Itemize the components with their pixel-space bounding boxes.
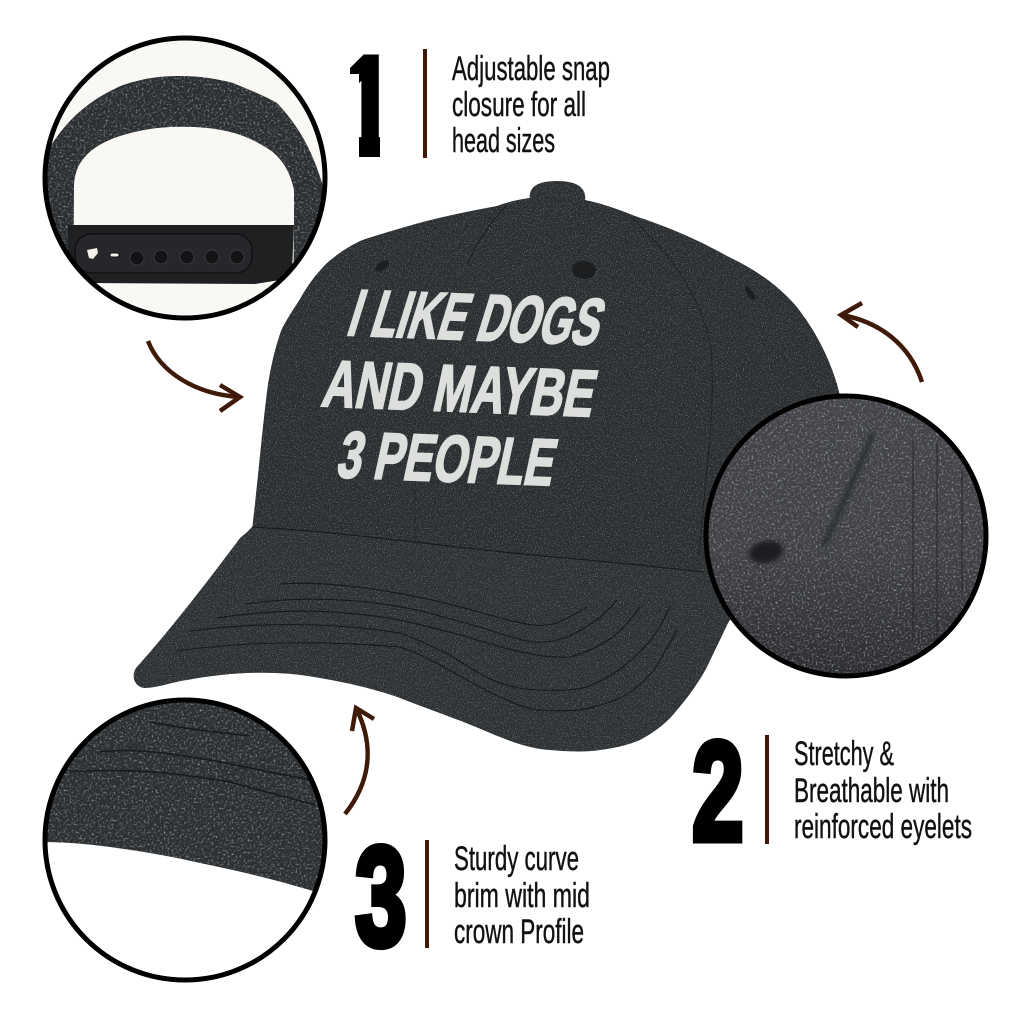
cap crown [252, 198, 845, 580]
brim fabric [48, 702, 322, 891]
feature 3 text: crown Profile [454, 913, 584, 951]
feature 1 text: head sizes [452, 122, 555, 160]
embroidered slogan: AND MAYBE [317, 348, 603, 431]
embroidered slogan [317, 277, 614, 500]
feature 2 [692, 714, 972, 871]
feature 3 [355, 819, 590, 976]
seam streak [823, 433, 873, 547]
snap strap inset [75, 234, 252, 273]
arrow to cap from circle 1 [148, 341, 240, 411]
number 2: 2 [692, 714, 744, 871]
embroidered slogan: I LIKE DOGS [340, 277, 614, 359]
feature 3 text: brim with mid [454, 877, 590, 915]
number 3: 3 [355, 819, 407, 976]
feature 3 text [454, 840, 590, 951]
snap holes [87, 248, 244, 265]
embroidered slogan: 3 PEOPLE [332, 419, 563, 500]
arrow to brim from circle 3 [345, 708, 374, 814]
feature 2 text: Stretchy & [794, 735, 894, 773]
cap seams and eyelets [252, 206, 757, 572]
callout circle 1: snap closure [40, 38, 340, 330]
feature 2 text [794, 735, 972, 846]
feature 3 text: Sturdy curve [454, 840, 579, 878]
brim stitching close-up [70, 722, 315, 805]
brim stitching [176, 583, 677, 711]
feature 2 text: Breathable with [794, 772, 949, 810]
callout circle 2: fabric and eyelet [700, 390, 992, 682]
stitching lines [913, 440, 962, 640]
arrow to cap from circle 2 [841, 303, 922, 382]
cap illustration [134, 181, 845, 752]
number 1: 1 [342, 29, 394, 186]
callout circle 3: brim [40, 690, 330, 980]
snap strap [68, 225, 294, 284]
feature 1 text: Adjustable snap [452, 50, 610, 88]
cap button [530, 181, 585, 202]
eyelet [747, 538, 785, 566]
feature 1 text [452, 50, 610, 160]
cap brim [134, 527, 760, 752]
feature 1 [350, 49, 610, 158]
fabric strap arch [48, 76, 322, 262]
feature 1 text: closure for all [452, 86, 586, 124]
